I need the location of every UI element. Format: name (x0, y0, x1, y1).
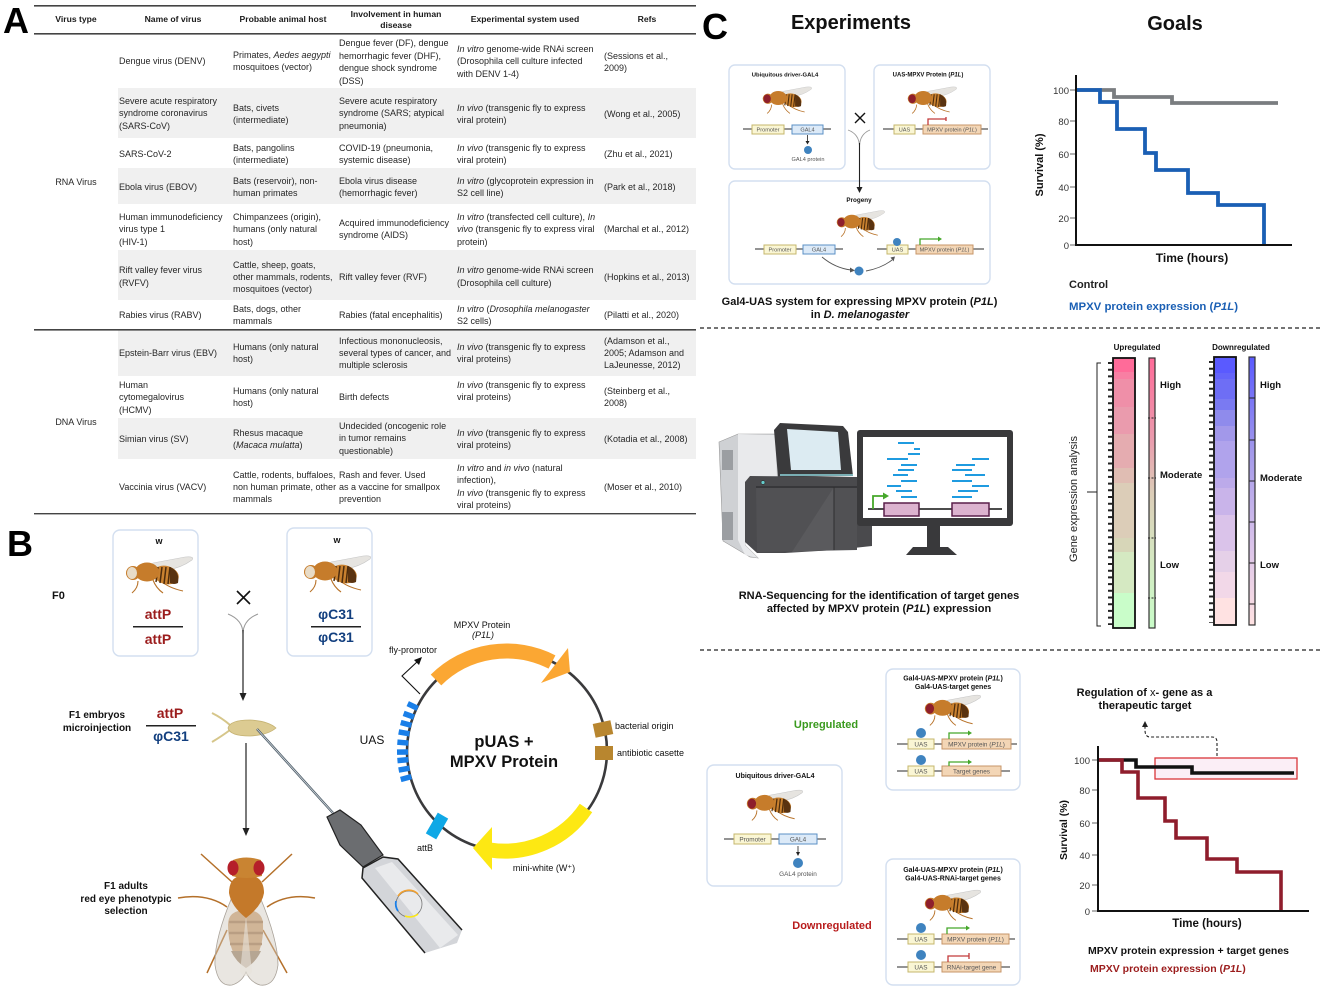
legend: MPXV protein expression (P1L) (1069, 301, 1238, 313)
card: ubiquitous driver: Promoter (756, 128, 780, 134)
row: Rabies: Rabies virus (RABV) (119, 310, 202, 320)
row: HCMV: (Steinberg et al., (604, 386, 670, 396)
plasmid title (450, 733, 558, 771)
row: Rabies: mammals (233, 316, 273, 326)
row: Rabies: (Pilatti et al., 2020) (604, 310, 679, 320)
row: HCMV: (HCMV) (119, 405, 152, 415)
table header: Name of virus (145, 14, 202, 24)
mini plasmid on syringe (396, 890, 422, 917)
card: upregulated genotype: Target genes (953, 768, 990, 776)
card: upregulated genotype (886, 669, 1020, 790)
card: attP parent: w (154, 536, 163, 546)
row: EBV: 2005; Adamson and (604, 348, 684, 358)
row: EBV: multiple sclerosis (339, 360, 408, 370)
axis label and bracket: Gene expression analysis (1068, 436, 1080, 562)
genotype attP over phiC31 (146, 705, 196, 744)
row: EBV: Infectious mononucleosis, (339, 336, 443, 346)
row: Rift valley: (Drosophila cell culture) (457, 278, 552, 288)
row: Rift valley (119, 260, 690, 294)
panel A: virus table (34, 5, 696, 514)
row: SARS-CoV-2: COVID-19 (pneumonia, (339, 143, 433, 153)
orange P1L arrow (436, 648, 570, 683)
row: HIV-1: Acquired immunodeficiency (339, 218, 450, 228)
row: Vaccinia: In vivo (transgenic fly to express (457, 488, 586, 498)
chart: therapeutic target survival: Survival (%) (1058, 800, 1070, 860)
card: downregulated genotype: Gal4-UAS-RNAi-target genes (905, 876, 1001, 882)
row: Vaccinia: Rash and fever. Used (339, 470, 426, 480)
chart: therapeutic target survival: 0 (1085, 907, 1090, 918)
card: downregulated genotype (886, 859, 1020, 985)
row: EBV: several types of cancer, and (339, 348, 451, 358)
row: Ebola: Bats (reservoir), non- (233, 176, 318, 186)
upregulated heatmap: Upregulated (1114, 343, 1160, 352)
card: UAS-MPXV protein: UAS (899, 128, 911, 134)
plasmid labels: fly-promotor (389, 645, 437, 655)
row: Vaccinia: prevention (339, 494, 381, 504)
row: SARS-CoV: syndrome (SARS; atypical (339, 108, 444, 118)
bacterial origin block (593, 720, 613, 738)
row: SARS-CoV-2: (Zhu et al., 2021) (604, 149, 673, 159)
label F1 adults: F1 adults (104, 881, 148, 892)
card: upregulated genotype: UAS (914, 742, 928, 748)
chart title: Regulation of x- gene as a (1077, 687, 1213, 699)
row: Simian virus: (Macaca mulatta) (233, 440, 303, 450)
row: Vaccinia: Vaccinia virus (VACV) (119, 482, 206, 492)
row: Vaccinia: mammals (233, 494, 273, 504)
row: Ebola: In vitro (glycoprotein expression in (457, 176, 594, 186)
chart: therapeutic target survival: 20 (1079, 881, 1090, 892)
chart: survival control vs MPXV: 0 (1064, 241, 1069, 252)
row: SARS-CoV: Bats, civets (233, 103, 280, 113)
card: UAS-MPXV protein: MPXV protein (P1L) (927, 128, 977, 134)
row: HCMV: In vivo (transgenic fly to express (457, 380, 586, 390)
label F1 embryos: microinjection (63, 723, 131, 734)
card: upregulated genotype: Gal4-UAS-MPXV protein (P1L) (903, 676, 1003, 682)
row: Vaccinia (119, 463, 682, 510)
card: ubiquitous driver: GAL4 protein (792, 157, 824, 163)
caption: Gal4-UAS: in D. melanogaster (811, 309, 910, 321)
row: Rabies: Bats, dogs, other (233, 304, 301, 314)
legend (1069, 279, 1238, 313)
row: Vaccinia: Cattle, rodents, buffaloes, (233, 470, 335, 480)
chart: survival control vs MPXV: 40 (1058, 183, 1069, 194)
downregulated scale: Moderate (1260, 473, 1302, 484)
row: HIV-1: In vitro (transfected cell culture), In (457, 212, 595, 222)
downregulated scale: High (1260, 380, 1281, 391)
row: EBV: In vivo (transgenic fly to express (457, 342, 586, 352)
genotype attP over phiC31: φC31 (153, 728, 189, 744)
card: progeny (729, 181, 990, 284)
row: Rift valley: mosquitoes (vector) (233, 284, 312, 294)
card: attP parent (113, 530, 198, 656)
row: Ebola: Ebola virus (EBOV) (119, 182, 197, 192)
row: HIV-1: Human immunodeficiency (119, 212, 223, 222)
row: Dengue: 2009) (604, 63, 627, 73)
panel B: cross scheme (52, 528, 684, 985)
row: Rift valley: (Hopkins et al., 2013) (604, 272, 690, 282)
row: SARS-CoV: pneumonia) (339, 121, 387, 131)
row: Vaccinia: In vitro and in vivo (natural (457, 463, 563, 473)
row: Dengue: In vitro genome-wide RNAi screen (457, 44, 594, 54)
row: Ebola: (hemorrhagic fever) (339, 188, 418, 198)
row: HCMV: cytomegalovirus (119, 392, 185, 402)
heading: Goals: Goals (1147, 13, 1203, 35)
upregulated scale: Moderate (1160, 470, 1202, 481)
row: EBV: LaJeunesse, 2012) (604, 360, 681, 370)
chart: therapeutic target survival: 60 (1079, 819, 1090, 830)
control curve (1077, 90, 1278, 103)
panel label C: C (702, 6, 728, 47)
row: Simian virus: (Kotadia et al., 2008) (604, 434, 688, 444)
panel label B: B (7, 523, 33, 564)
row: Vaccinia: viral proteins) (457, 500, 511, 510)
card: attP parent: attP (145, 631, 171, 647)
card: downregulated genotype: RNAi-target gene (947, 964, 997, 972)
arrow to adults (242, 743, 250, 836)
row: Simian virus: In vivo (transgenic fly to express (457, 428, 586, 438)
label F1 adults: selection (104, 906, 148, 917)
card: progeny: MPXV protein (P1L) (920, 248, 970, 254)
card: downregulated genotype: UAS (914, 964, 928, 972)
table header: Experimental system used (471, 14, 579, 24)
caption: RNA-Sequencing: RNA-Sequencing for the identification of target genes (739, 590, 1019, 602)
row: Rabies: Rabies (fatal encephalitis) (339, 310, 443, 320)
sequencing reads (887, 443, 989, 497)
row: Vaccinia: (Moser et al., 2010) (604, 482, 682, 492)
card: phiC31 parent: φC31 (318, 629, 354, 645)
row: Rabies: S2 cells) (457, 316, 492, 326)
row: SARS-CoV: viral protein) (457, 115, 507, 125)
row: SARS-CoV-2: SARS-CoV-2 (119, 149, 172, 159)
plasmid labels: mini-white (W⁺) (513, 863, 575, 873)
row: HIV-1: Chimpanzees (origin), (233, 212, 321, 222)
downregulated scale (1249, 357, 1302, 625)
row: Simian virus: viral proteins) (457, 440, 511, 450)
promoter arrow (402, 657, 422, 694)
plasmid labels (360, 620, 684, 873)
cross arrow to embryos (228, 614, 258, 701)
row: Dengue: (Sessions et al., (604, 51, 668, 61)
virus type labels: DNA Virus (55, 417, 97, 427)
row: Simian virus: Simian virus (SV) (119, 434, 189, 444)
card: progeny: Promoter (768, 248, 792, 254)
row: Rift valley: Cattle, sheep, goats, (233, 260, 316, 270)
row: Rift valley: (RVFV) (119, 278, 149, 288)
gene expression analysis panel (1068, 343, 1302, 628)
label F1 adults (80, 881, 172, 917)
row: Vaccinia: non human primate, other (233, 482, 336, 492)
chart: survival control vs MPXV: 80 (1058, 117, 1069, 128)
row: Dengue: (DSS) (339, 76, 364, 86)
embryo (212, 713, 276, 742)
row: EBV: viral proteins) (457, 354, 511, 364)
row: HIV-1: protein) (457, 237, 488, 247)
axis label and bracket (1068, 363, 1101, 626)
card: ubiquitous driver: GAL4 (800, 128, 815, 134)
chart title: therapeutic target (1099, 700, 1192, 712)
row: Dengue: dengue shock syndrome (339, 63, 437, 73)
MPXV curve (1099, 760, 1281, 911)
row: Ebola: (Park et al., 2018) (604, 182, 676, 192)
plasmid title: MPXV Protein (450, 753, 558, 771)
caption: RNA-Sequencing (739, 590, 1019, 615)
label F1 embryos (63, 710, 131, 734)
row: Dengue: mosquitoes (vector) (233, 62, 312, 72)
table header: Refs (638, 14, 657, 24)
row: Rift valley: Rift valley fever virus (119, 265, 203, 275)
row: SARS-CoV-2: Bats, pangolins (233, 143, 295, 153)
row: SARS-CoV: In vivo (transgenic fly to express (457, 103, 586, 113)
plasmid labels: attB (417, 843, 433, 853)
row: Rabies: In vitro (Drosophila melanogaster (457, 304, 591, 314)
row: SARS-CoV-2: viral protein) (457, 155, 507, 165)
card: UAS-MPXV protein: UAS-MPXV Protein (P1L) (893, 72, 963, 78)
card: attP parent: attP (145, 606, 171, 622)
row: Rift valley: In vitro genome-wide RNAi screen (457, 265, 594, 275)
row: Simian virus: questionable) (339, 446, 393, 456)
highlight box (1155, 758, 1297, 779)
plasmid labels: bacterial origin (615, 721, 674, 731)
legend: MPXV protein expression (P1L) (1090, 963, 1246, 975)
upregulated heatmap (1110, 343, 1160, 628)
card: ubiquitous driver lower: Ubiquitous driver-GAL4 (736, 773, 815, 780)
row: SARS-CoV: (SARS-CoV) (119, 121, 170, 131)
legend: Control (1069, 279, 1108, 291)
plasmid title: pUAS + (474, 733, 534, 751)
row: SARS-CoV-2 (119, 143, 673, 165)
chart title (1077, 687, 1213, 712)
row: HIV-1: host) (233, 237, 253, 247)
row: Ebola (119, 176, 676, 198)
table header (55, 9, 657, 30)
card: phiC31 parent (287, 528, 372, 656)
monitor with reads (857, 430, 1013, 555)
plasmid labels: MPXV Protein (454, 620, 510, 630)
card: ubiquitous driver lower (707, 765, 842, 886)
cross symbol (237, 591, 250, 604)
row: Dengue: Dengue virus (DENV) (119, 56, 206, 66)
table header: Virus type (55, 14, 97, 24)
card: ubiquitous driver (729, 65, 845, 169)
row: Simian virus (119, 421, 688, 456)
chart: survival control vs MPXV: 100 (1053, 86, 1069, 97)
heading: Experiments: Experiments (791, 12, 911, 34)
card: upregulated genotype: UAS (914, 768, 928, 776)
row: HIV-1: (HIV-1) (119, 237, 148, 247)
row: Dengue: (Drosophila cell culture infected (457, 56, 583, 66)
row: HIV-1 (119, 212, 689, 247)
dashed arrow (1142, 721, 1217, 756)
label: Upregulated: Upregulated (794, 719, 858, 731)
row: HCMV: Human (119, 380, 148, 390)
card: progeny: GAL4 (812, 248, 826, 254)
chart: survival control vs MPXV: Time (hours) (1156, 251, 1228, 265)
card: ubiquitous driver lower: Promoter (739, 836, 767, 844)
plasmid labels: UAS (360, 733, 384, 747)
row: HIV-1: (Marchal et al., 2012) (604, 224, 689, 234)
icon: adult fly with red eyes (178, 854, 315, 985)
row: EBV: Humans (only natural (233, 342, 319, 352)
row: Rift valley: other mammals, rodents, (233, 272, 333, 282)
card: ubiquitous driver lower: GAL4 (790, 836, 807, 844)
row: HCMV (119, 380, 670, 415)
row: Simian virus: Undecided (oncogenic role (339, 421, 446, 431)
row: SARS-CoV: syndrome coronavirus (119, 108, 208, 118)
row: Ebola: S2 cell line) (457, 188, 504, 198)
upregulated scale: Low (1160, 560, 1180, 571)
microinjection needle and syringe (257, 729, 462, 953)
chart: therapeutic target survival: 40 (1079, 851, 1090, 862)
caption: RNA-Sequencing: affected by MPXV protein (P1L) expression (767, 603, 991, 615)
row: Ebola: human primates (233, 188, 298, 198)
row: SARS-CoV: (Wong et al., 2005) (604, 109, 680, 119)
row: SARS-CoV: (intermediate) (233, 115, 289, 125)
MPXV curve (1077, 90, 1264, 245)
table header: Involvement in human (351, 9, 441, 19)
row: HCMV: Birth defects (339, 392, 390, 402)
row: Rift valley: Rift valley fever (RVF) (339, 272, 427, 282)
row: HIV-1: syndrome (AIDS) (339, 230, 408, 240)
card: progeny: Progeny (846, 197, 872, 204)
card: upregulated genotype: MPXV protein (P1L) (948, 742, 1005, 748)
upregulated scale: High (1160, 380, 1181, 391)
card: upregulated genotype: Gal4-UAS-target genes (915, 684, 991, 691)
chart: therapeutic target survival (1058, 687, 1309, 975)
label: Downregulated: Downregulated (792, 920, 872, 932)
row: Vaccinia: infection), (457, 475, 496, 485)
row: Dengue: Primates, Aedes aegypti (233, 50, 332, 60)
table rules (34, 5, 696, 514)
legend: MPXV protein expression + target genes (1088, 945, 1289, 957)
row: SARS-CoV-2: (intermediate) (233, 155, 289, 165)
row: SARS-CoV: Severe acute respiratory (339, 96, 438, 106)
row: Simian virus: in tumor remains (339, 433, 407, 443)
virus type labels (55, 177, 97, 427)
row: SARS-CoV: Severe acute respiratory (119, 96, 218, 106)
chart: survival control vs MPXV (1034, 75, 1292, 313)
row: Vaccinia: as a vaccine for smallpox (339, 482, 441, 492)
row: HCMV: viral proteins) (457, 392, 511, 402)
genotype attP over phiC31: attP (157, 705, 183, 721)
card: downregulated genotype: Gal4-UAS-MPXV protein (P1L) (903, 867, 1003, 874)
chart: therapeutic target survival: 80 (1079, 786, 1090, 797)
caption: Gal4-UAS (722, 296, 998, 321)
card: progeny: UAS (892, 248, 904, 254)
attB block (426, 813, 448, 839)
card: downregulated genotype: UAS (914, 936, 928, 944)
chart: survival control vs MPXV: 20 (1058, 214, 1069, 225)
antibiotic block (595, 746, 613, 760)
row: HIV-1: humans (only natural (233, 224, 317, 234)
row: Dengue: Dengue fever (DF), dengue (339, 38, 449, 48)
row: Dengue: with DENV 1-4) (456, 69, 519, 79)
row: Simian virus: Rhesus macaque (233, 428, 303, 438)
yellow mini-white arrow (473, 808, 586, 870)
upregulated scale (1148, 358, 1202, 628)
row: Ebola: Ebola virus disease (339, 176, 417, 186)
row: SARS-CoV-2: In vivo (transgenic fly to express (457, 143, 586, 153)
chart: therapeutic target survival: 100 (1074, 756, 1090, 767)
card: ubiquitous driver: Ubiquitous driver-GAL4 (752, 72, 819, 78)
row: HCMV: host) (233, 398, 253, 408)
card: ubiquitous driver lower: GAL4 protein (779, 871, 817, 878)
row: HCMV: Humans (only natural (233, 386, 319, 396)
card: phiC31 parent: w (332, 535, 341, 545)
target genes curve (1099, 760, 1294, 773)
cross symbol and arrow to progeny (848, 113, 870, 193)
card: downregulated genotype: MPXV protein (P1L) (947, 936, 1004, 944)
sequencing machine (719, 423, 872, 558)
row: HIV-1: vivo (transgenic fly to express viral (457, 224, 595, 234)
label F0: F0 (52, 590, 65, 602)
downregulated heatmap: Downregulated (1212, 343, 1270, 352)
caption: Gal4-UAS: Gal4-UAS system for expressing MPXV protein (P1L) (722, 296, 998, 308)
panel label A: A (3, 0, 29, 41)
row: EBV: (Adamson et al., (604, 336, 670, 346)
gene track (868, 508, 1002, 510)
plasmid labels: antibiotic casette (617, 748, 684, 758)
row: EBV: host) (233, 354, 253, 364)
chart: survival control vs MPXV: Survival (%) (1034, 133, 1046, 196)
section: Gal4-UAS cross (722, 65, 998, 321)
label F1 adults: red eye phenotypic (80, 894, 172, 905)
row: SARS-CoV (119, 96, 680, 131)
plasmid map (360, 620, 684, 873)
row: Dengue: hemorrhagic fever (DHF), (339, 51, 441, 61)
UAS repeats (397, 704, 418, 779)
legend (1088, 945, 1289, 975)
row: SARS-CoV-2: systemic disease) (339, 155, 411, 165)
row: HCMV: 2008) (604, 398, 627, 408)
chart: survival control vs MPXV: 60 (1058, 150, 1069, 161)
row: Rabies (119, 304, 679, 326)
row: Dengue (119, 38, 668, 86)
label F1 embryos: F1 embryos (69, 710, 126, 721)
table row shading (118, 88, 696, 459)
table header: Probable animal host (240, 14, 327, 24)
card: phiC31 parent: φC31 (318, 606, 354, 622)
plasmid labels: (P1L) (472, 630, 494, 640)
downregulated scale: Low (1260, 560, 1280, 571)
virus type labels: RNA Virus (55, 177, 97, 187)
card: UAS-MPXV protein (874, 65, 990, 169)
table header: disease (380, 20, 412, 30)
downregulated heatmap (1212, 343, 1270, 625)
chart: therapeutic target survival: Time (hours) (1172, 918, 1242, 930)
row: EBV (119, 336, 684, 370)
row: HIV-1: virus type 1 (119, 224, 165, 234)
row: EBV: Epstein-Barr virus (EBV) (119, 348, 217, 358)
